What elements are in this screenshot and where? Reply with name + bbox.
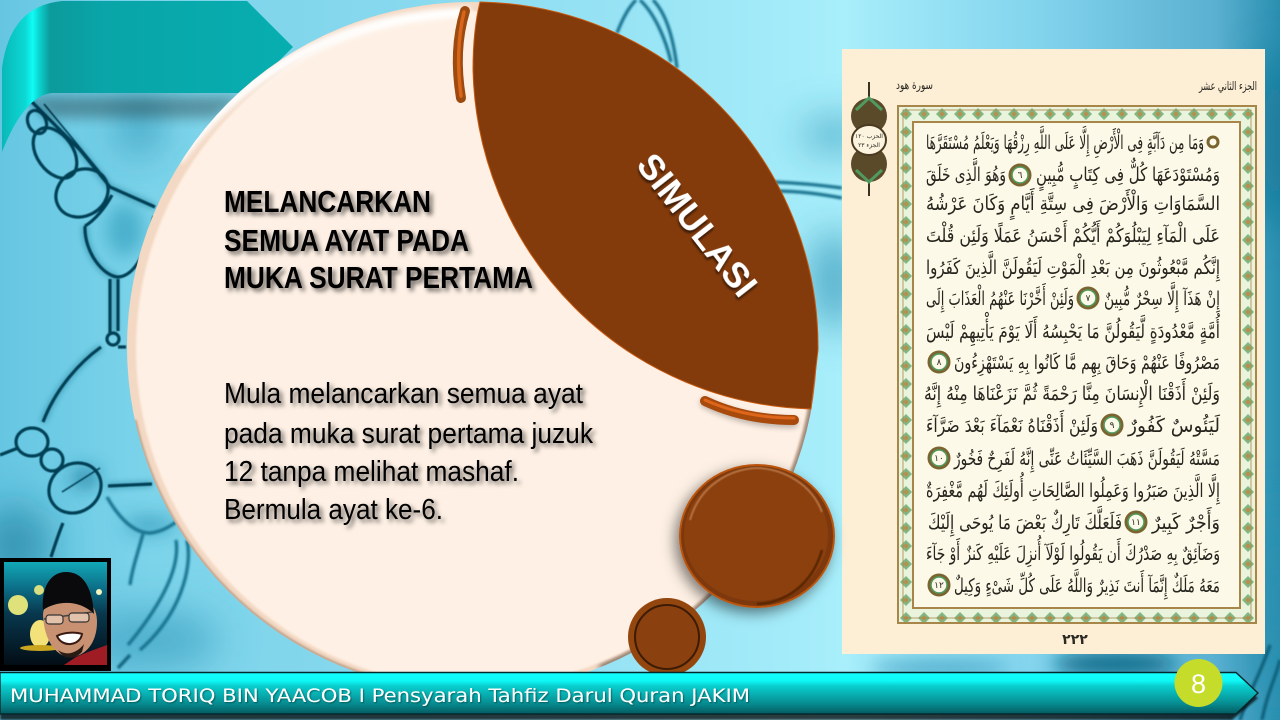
verse markers: ١١: [1131, 518, 1141, 528]
page number badge: [1174, 659, 1222, 707]
Arabic text lines: [924, 126, 1221, 600]
verse markers: ١٢: [934, 581, 944, 591]
Arabic text lines: السَّمَاوَاتِ وَالْأَرْضَ فِى سِتَّةِ أَيَّامٍ وَكَانَ عَرْشُهُ: [926, 188, 1220, 221]
heading: melancarkan semua ayat: SEMUA AYAT PADA: [224, 223, 469, 258]
juz medallion ornament: الجزء ٢٣: [858, 142, 880, 149]
panel: brown leaf shape: [473, 2, 818, 409]
page frame and ornamental border: [898, 106, 1256, 623]
heading: melancarkan semua ayat: MUKA SURAT PERTAMA: [224, 260, 533, 295]
body text: instructions: Bermula ayat ke-6.: [224, 494, 443, 526]
accent pill: top: [458, 11, 465, 98]
panel: Quran page: [842, 49, 1265, 654]
Arabic text lines: وَلَئِنْ أَخَّرْنَا عَنْهُمُ الْعَذَابَ إِلَى: [926, 283, 1074, 313]
body text: instructions: pada muka surat pertama juzuk: [224, 418, 593, 450]
page number: ٢٢٢: [1062, 632, 1088, 648]
accent pill: bottom: [705, 400, 794, 423]
verse markers: ٨: [937, 358, 942, 368]
Arabic text lines: وَلَئِنْ أَذَقْنَاهُ نَعْمَآءَ بَعْدَ ضَرَّآءَ: [926, 410, 1098, 437]
Arabic text lines: وَلَئِنْ أَذَقْنَا الْإِنسَانَ مِنَّا رَحْمَةً ثُمَّ نَزَعْنَاهَا مِنْهُ إِنَّهُ: [924, 378, 1220, 408]
heading: melancarkan semua ayat: [224, 184, 533, 295]
footer bar: [0, 672, 1258, 720]
verse markers: ٩: [1110, 421, 1115, 431]
presenter credit: MUHAMMAD TORIQ BIN YAACOB I Pensyarah Tahfiz Darul Quran JAKIM: [10, 685, 750, 707]
verse markers: ٦: [1018, 171, 1023, 181]
body text: instructions: Mula melancarkan semua ayat: [224, 378, 583, 410]
verse markers: ١٠: [934, 454, 944, 464]
presenter photo: [0, 558, 111, 671]
Arabic text lines: وَمُسْتَوْدَعَهَا كُلٌّ فِى كِتَابٍ مُّبِينٍ: [1036, 158, 1220, 192]
body text: instructions: [224, 378, 593, 526]
juz medallion ornament: الحزب ١٢٠: [855, 133, 883, 140]
decorative circle: large brown: [679, 464, 835, 608]
juz medallion ornament: [851, 82, 887, 196]
body text: instructions: 12 tanpa melihat mashaf.: [224, 456, 519, 488]
verse markers: ٧: [1086, 294, 1091, 304]
verse markers: [929, 137, 1218, 595]
Arabic text lines: عَلَى الْمَآءِ لِيَبْلُوَكُمْ أَيُّكُمْ أَحْسَنُ عَمَلًا وَلَئِن قُلْتَ: [926, 220, 1220, 247]
Arabic text lines: فَلَعَلَّكَ تَارِكٌ بَعْضَ مَا يُوحَى إِلَيْكَ: [928, 506, 1122, 537]
ribbon: top-left teal banner: [2, 1, 293, 152]
page number badge: 8: [1191, 669, 1206, 699]
label: SIMULASI: SIMULASI: [629, 146, 764, 304]
page header: [896, 78, 1257, 94]
heading: melancarkan semua ayat: MELANCARKAN: [224, 184, 431, 219]
page header: سورة هود: [896, 78, 933, 93]
Arabic text lines: إِنْ هَذَآ إِلَّا سِحْرٌ مُّبِينٌ: [1104, 282, 1220, 313]
Arabic text lines: لَيَئُوسٌ كَفُورٌ: [1127, 414, 1221, 437]
Arabic text lines: وَأَجْرٌ كَبِيرٌ: [1151, 507, 1220, 535]
panel: large cream circle: [127, 2, 818, 692]
Arabic text lines: وَهُوَ الَّذِى خَلَقَ: [926, 158, 1006, 186]
decorative circle: small brown: [628, 598, 706, 676]
